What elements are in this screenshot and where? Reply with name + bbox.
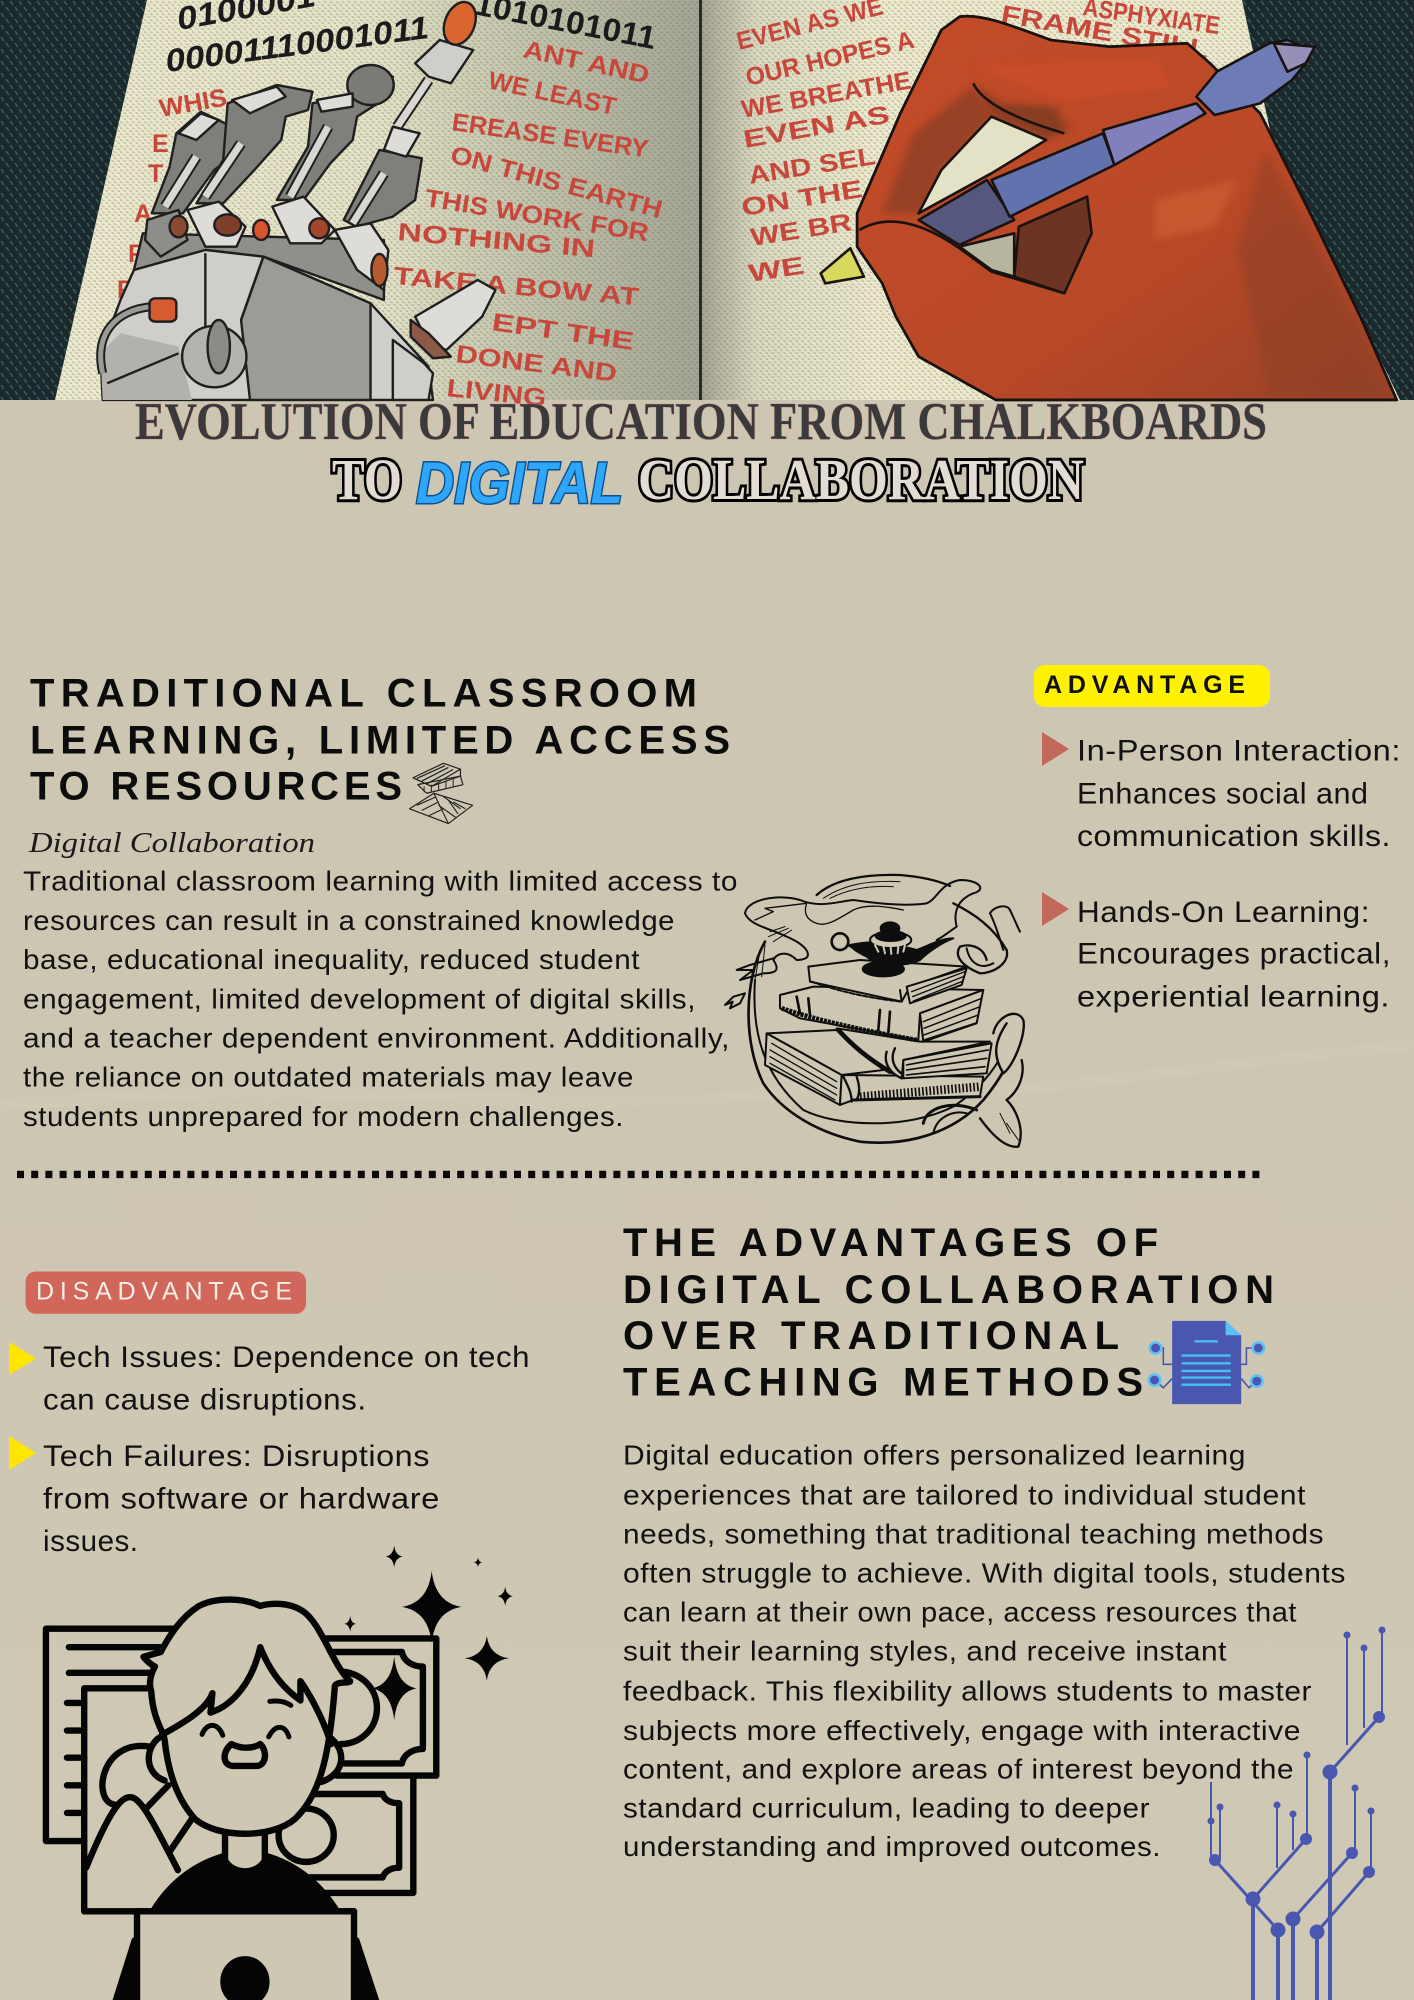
panel: traditional classroom learning: [23, 672, 738, 1132]
text block: traditional learning description: engagement, limited development of digital skills,: [23, 984, 696, 1014]
dark backdrop: [0, 0, 1414, 400]
text block: digital education description: often struggle to achieve. With digital tools, students: [623, 1558, 1346, 1589]
bullet: tech failures: from software or hardware: [43, 1482, 440, 1516]
title line 2: DIGITAL: [416, 451, 623, 516]
text block: traditional learning description: students unprepared for modern challenges.: [23, 1101, 624, 1132]
illustration: smiling student with laptop: [46, 1545, 513, 2000]
red handwriting on the pages: WE: [747, 252, 806, 288]
light finger plates: [179, 113, 219, 140]
text block: traditional learning description: Traditional classroom learning with limited access to: [23, 865, 738, 896]
bullet: tech issues: [9, 1341, 530, 1417]
bullet: in-person interaction: [1042, 732, 1401, 853]
body: [153, 1856, 337, 1911]
red handwriting on the pages: AND SEL: [747, 142, 877, 190]
text block: digital education description: [623, 1439, 1346, 1862]
bottom book: [767, 1030, 883, 1075]
bullet: tech failures: issues.: [43, 1525, 138, 1558]
text block: digital education description: needs, something that traditional teaching methods: [623, 1518, 1324, 1549]
binary digits on the page: [163, 0, 659, 79]
second book: [780, 987, 983, 1040]
bullet: in-person interaction: In-Person Interaction:: [1077, 734, 1401, 768]
red handwriting on the pages: F: [128, 240, 143, 268]
badge: disadvantage: DISADVANTAGE: [36, 1278, 292, 1306]
smoke ring: [725, 875, 1020, 1143]
red handwriting on the pages: ANT AND: [521, 35, 652, 89]
heading: traditional classroom: TRADITIONAL CLASSROOM: [30, 672, 697, 716]
ears: [149, 1734, 341, 1782]
badge: advantage: ADVANTAGE: [1044, 671, 1245, 699]
open book pages: [55, 0, 1400, 400]
text block: digital education description: suit their learning styles, and receive instant: [623, 1636, 1227, 1667]
red handwriting on the pages: FRAME STILL: [999, 0, 1211, 64]
hand shape: [857, 16, 1397, 400]
red handwriting on the pages: OUR HOPES A: [743, 26, 917, 92]
title: [135, 393, 1267, 516]
heading: advantages of digital collaboration: DIGITAL COLLABORATION: [623, 1268, 1274, 1312]
text block: traditional learning description: and a teacher dependent environment. Additionally,: [23, 1023, 730, 1054]
human hand holding pen: [821, 16, 1397, 400]
badge: disadvantage: [26, 1272, 306, 1314]
bullet: hands-on learning: experiential learning.: [1077, 981, 1390, 1014]
red handwriting on the pages: A: [134, 200, 152, 228]
books: [765, 960, 992, 1105]
badge: advantage: [1034, 665, 1270, 707]
title line 2: [332, 447, 1084, 516]
heading: advantages of digital collaboration: TEACHING METHODS: [623, 1360, 1143, 1404]
bullet: hands-on learning: [1042, 892, 1391, 1014]
text block: digital education description: standard curriculum, leading to deeper: [623, 1792, 1150, 1823]
red handwriting on the pages: LIVING: [445, 374, 548, 412]
knuckles: [145, 210, 187, 257]
red handwriting on the pages: WE BR: [749, 208, 854, 252]
text block: digital education description: feedback. This flexibility allows students to master: [623, 1676, 1312, 1706]
text block: traditional learning description: the reliance on outdated materials may leave: [23, 1062, 634, 1093]
title line 2: TO: [332, 447, 402, 512]
icon: small books: [410, 763, 473, 824]
text block: traditional learning description: [23, 865, 738, 1132]
subheading: digital collaboration: Digital Collaboration: [28, 827, 315, 859]
panel: advantages of digital collaboration: [623, 1221, 1346, 1862]
red handwriting on the pages: R: [117, 276, 135, 304]
head and hair: [144, 1600, 350, 1834]
panel: advantage: [1034, 665, 1401, 1014]
heading: traditional classroom: LEARNING, LIMITED ACCESS: [30, 718, 730, 762]
bullet: tech failures: Tech Failures: Disruptions: [43, 1440, 430, 1473]
nib: [821, 248, 864, 283]
text block: digital education description: can learn at their own pace, access resources that: [623, 1596, 1297, 1627]
face: [202, 1701, 291, 1737]
neck: [225, 1831, 265, 1871]
sparkles: [344, 1545, 513, 1720]
text block: digital education description: experiences that are tailored to individual student: [623, 1480, 1306, 1511]
text block: traditional learning description: base, educational inequality, reduced student: [23, 944, 640, 975]
red handwriting on the pages: WE BREATHE: [739, 66, 913, 124]
banknotes: [320, 1638, 436, 1776]
red handwriting on the pages: WHIS: [157, 84, 229, 123]
heading: advantages of digital collaboration: OVER TRADITIONAL: [623, 1314, 1119, 1358]
red handwriting on the pages: EVEN AS: [741, 101, 892, 154]
shadowed finger areas: [973, 83, 1069, 140]
red handwriting on the pages: NOTHING IN: [396, 218, 596, 263]
text block: digital education description: content, and explore areas of interest beyond the: [623, 1754, 1294, 1785]
red handwriting on the pages: E: [152, 130, 169, 158]
bullet: in-person interaction: Enhances social and: [1077, 778, 1368, 811]
red handwriting on the pages: THIS WORK FOR: [423, 184, 651, 247]
red handwriting on the pages: ON THIS EARTH: [447, 141, 665, 224]
fringe: [163, 1647, 331, 1744]
heading: traditional classroom: TO RESOURCES: [30, 764, 402, 808]
dotted divider: [17, 1171, 1265, 1178]
icon: digital document: [1149, 1321, 1264, 1404]
bullet: in-person interaction: communication skills.: [1077, 820, 1391, 853]
bullet: tech issues: can cause disruptions.: [43, 1384, 367, 1417]
red handwriting on the pages: TAKE A BOW AT: [392, 262, 640, 311]
text block: digital education description: Digital education offers personalized learning: [623, 1439, 1246, 1470]
bullet: hands-on learning: Hands-On Learning:: [1077, 896, 1370, 929]
circuit tree decoration: [1208, 1626, 1386, 2000]
robot hand: [100, 0, 496, 400]
raised arm: [102, 1746, 149, 1805]
palm back: [134, 233, 384, 300]
heading: traditional classroom: [30, 672, 730, 808]
finger rods: [165, 80, 429, 223]
notebook: [46, 1629, 180, 1841]
text block: traditional learning description: resources can result in a constrained knowledge: [23, 905, 675, 936]
palm: [100, 250, 433, 400]
red handwriting on the pages: EREASE EVERY: [450, 108, 650, 164]
bullet: tech failures: [9, 1436, 440, 1558]
red handwriting on the pages: EPT THE: [490, 308, 636, 356]
third book: [837, 1028, 990, 1078]
bullet: hands-on learning: Encourages practical,: [1077, 938, 1391, 971]
thumb: [393, 340, 433, 400]
panel: disadvantage: [9, 1272, 530, 1558]
top book: [808, 960, 967, 1002]
heading: advantages of digital collaboration: [623, 1221, 1274, 1404]
heading: advantages of digital collaboration: THE ADVANTAGES OF: [623, 1221, 1158, 1265]
lamp: [832, 922, 953, 976]
bullet: tech issues: Tech Issues: Dependence on tech: [43, 1341, 530, 1374]
icon: genie lamp on stacked books: [725, 875, 1024, 1147]
text block: digital education description: subjects more effectively, engage with interactive: [623, 1715, 1301, 1746]
book hatching: [770, 1043, 837, 1100]
pen: [919, 180, 1014, 245]
laptop: [137, 1911, 354, 2000]
red handwriting on the pages: WE LEAST: [486, 66, 619, 121]
paper gaps: [919, 117, 1046, 213]
lower ribbons: [993, 1014, 1024, 1073]
red handwriting on the pages: [117, 0, 1222, 412]
red handwriting on the pages: T: [148, 160, 163, 188]
hero illustration: robot and human hands writing in a book: [0, 0, 1414, 412]
red handwriting on the pages: DONE AND: [454, 340, 618, 388]
text block: digital education description: understanding and improved outcomes.: [623, 1831, 1161, 1862]
finger casings: [152, 112, 237, 213]
binary digits on the page: 00001110001011: [163, 9, 431, 79]
title line 2: COLLABORATION: [638, 447, 1084, 512]
red handwriting on the pages: ON THE: [740, 175, 864, 222]
